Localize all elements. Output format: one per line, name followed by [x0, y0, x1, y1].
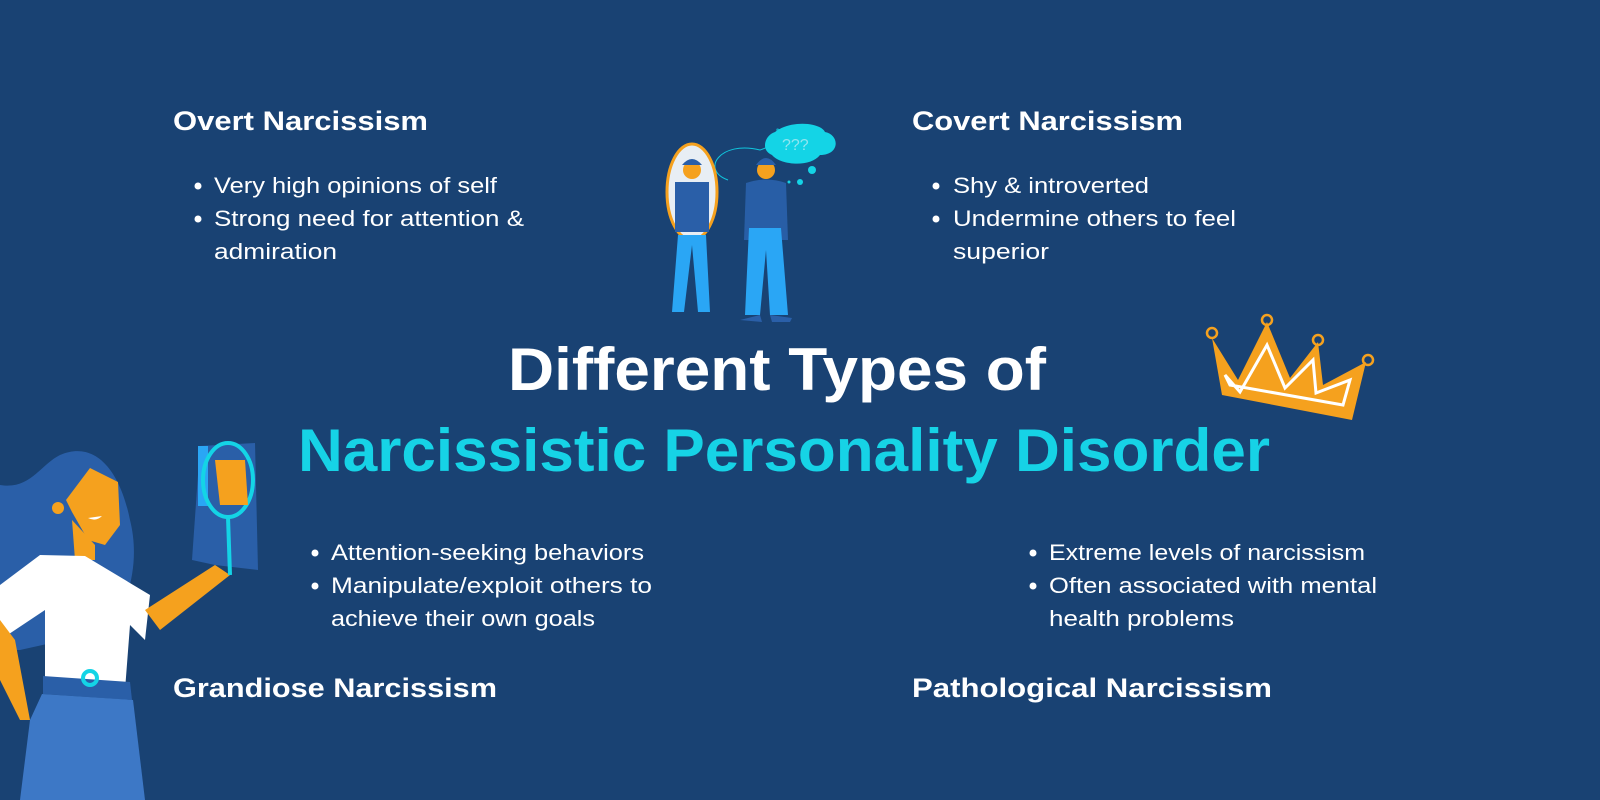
bullets: grandiose	[312, 540, 652, 631]
heading: grandiose: Grandiose Narcissism	[173, 673, 497, 703]
bullets: covert: superior	[953, 239, 1049, 264]
bullets: overt	[194, 173, 524, 264]
bullets: grandiose: Manipulate/exploit others to	[331, 573, 652, 598]
title: Narcissistic Personality Disorder	[298, 417, 1270, 484]
bullets: pathological: Extreme levels of narcissism	[1049, 540, 1365, 565]
heading: overt: Overt Narcissism	[173, 106, 428, 136]
bullets: overt: Very high opinions of self	[214, 173, 498, 198]
bullets: grandiose: achieve their own goals	[331, 606, 595, 631]
bullets: covert	[932, 173, 1236, 264]
bullets: grandiose: Attention-seeking behaviors	[331, 540, 644, 565]
crown	[1207, 315, 1373, 420]
bullets: covert: Undermine others to feel	[953, 206, 1236, 231]
illustration: man and mirror	[667, 124, 836, 322]
title	[298, 336, 1270, 484]
bullets: overt: Strong need for attention &	[214, 206, 524, 231]
title: Different Types of	[508, 336, 1047, 403]
bullets: pathological: Often associated with mental	[1049, 573, 1377, 598]
bullets: pathological: health problems	[1049, 606, 1234, 631]
bullets: pathological	[1030, 540, 1377, 631]
illustration: woman with mirror	[0, 443, 258, 800]
bullets: covert: Shy & introverted	[953, 173, 1149, 198]
bullets: overt: admiration	[214, 239, 337, 264]
heading: covert: Covert Narcissism	[912, 106, 1183, 136]
heading: pathological: Pathological Narcissism	[912, 673, 1272, 703]
illustration: man and mirror: ???	[782, 137, 809, 154]
